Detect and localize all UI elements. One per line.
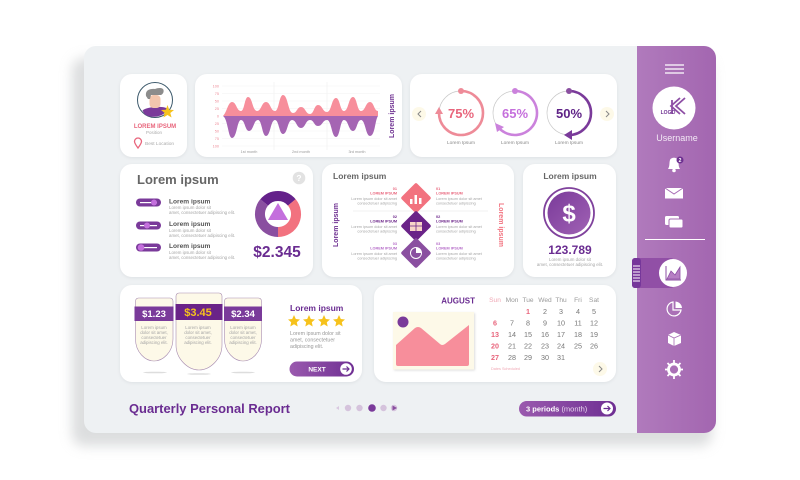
- diamond 3: [400, 237, 432, 269]
- dates: 26: [590, 342, 598, 350]
- dates: 23: [541, 342, 549, 350]
- price card 3: consectetuer: [230, 335, 256, 340]
- panel: profile: [120, 74, 187, 157]
- dates: 3: [559, 307, 563, 316]
- dates: 2: [543, 307, 547, 316]
- price card 2: $3.45: [184, 307, 212, 319]
- dates: 17: [557, 330, 565, 339]
- dates: 29: [524, 353, 532, 362]
- ring: 65%: 65%: [502, 106, 528, 121]
- left texts: [351, 187, 398, 260]
- toggle row 3: Lorem ipsum dolor sit: [169, 250, 212, 255]
- heading: Lorem ipsum: [290, 303, 344, 313]
- icon: help: ?: [296, 173, 302, 183]
- weekday headers: Thu: [555, 297, 567, 304]
- right texts: 03: [436, 242, 440, 246]
- icon: dollar coin: $: [562, 200, 576, 228]
- panel: toggles and donut: [120, 164, 313, 277]
- left texts: Lorem ipsum dolor sit amet: [351, 252, 398, 256]
- price card 3: $2.34: [231, 309, 256, 320]
- weekday headers: Tue: [522, 297, 534, 304]
- ring: 75%: 75%: [448, 106, 474, 121]
- toggle row 3: amet, consectetuer adipiscing elit.: [169, 255, 235, 260]
- panel: calendar: [374, 285, 616, 382]
- weekday headers: Fri: [574, 297, 582, 304]
- dates: 15: [524, 330, 532, 339]
- toggle row 3: [136, 243, 235, 260]
- sidebar background: [637, 46, 716, 433]
- ring: 65%: [493, 88, 537, 146]
- left texts: consectetuer adipiscing: [357, 202, 397, 206]
- dates: 1: [526, 307, 530, 316]
- price card 1: adipiscing elit.: [140, 340, 168, 345]
- dates: 21: [508, 342, 516, 350]
- dates: 24: [557, 342, 565, 350]
- y axis labels: 50: [215, 100, 219, 104]
- x axis labels: [241, 150, 366, 154]
- left texts: consectetuer adipiscing: [357, 256, 397, 260]
- icon: pie: [667, 302, 682, 316]
- price card 2: dolor sit amet,: [184, 330, 212, 335]
- sidebar: [632, 46, 716, 433]
- dates: 12: [590, 318, 598, 328]
- right texts: LOREM IPSUM: [436, 192, 463, 196]
- location: Best Location: [145, 141, 174, 147]
- dates: 13: [491, 330, 499, 339]
- icon: active chart: [659, 259, 687, 287]
- divider: [645, 239, 705, 240]
- left texts: Lorem ipsum dolor sit amet: [351, 225, 398, 229]
- toggle row 2: [136, 221, 235, 238]
- price card 2: [176, 293, 222, 375]
- ring: 75%: Lorem Ipsum: [447, 140, 475, 146]
- panel: pricing: [120, 285, 362, 382]
- dates: 5: [592, 307, 596, 316]
- left texts: 03: [393, 242, 397, 246]
- dates: 30: [541, 353, 549, 362]
- grid: [222, 82, 380, 150]
- rating stars: [288, 315, 345, 326]
- active tab: [632, 258, 674, 288]
- description: [290, 331, 341, 350]
- dates: [491, 307, 598, 362]
- left texts: LOREM IPSUM: [370, 220, 397, 224]
- value: $2.345: [253, 244, 301, 261]
- icon: menu: [665, 65, 684, 73]
- weekday headers: Wed: [538, 297, 552, 304]
- avatar: [138, 82, 172, 118]
- button: previous: [412, 107, 426, 121]
- diamond 1: [400, 182, 432, 214]
- y axis labels: 25: [215, 107, 219, 111]
- right texts: 02: [436, 215, 440, 219]
- left texts: consectetuer adipiscing: [357, 230, 397, 234]
- y axis labels: 25: [215, 122, 219, 126]
- dates: 19: [590, 330, 598, 339]
- heading: Lorem ipsum: [137, 172, 219, 187]
- weekday headers: [489, 297, 599, 304]
- dates: 9: [543, 318, 547, 328]
- panel: coin: [523, 164, 616, 277]
- right texts: LOREM IPSUM: [436, 220, 463, 224]
- name: LOREM IPSUM: [134, 124, 176, 130]
- username: Username: [656, 133, 698, 143]
- price card 3: adipiscing elit.: [229, 340, 257, 345]
- description: Lorem ipsum dolor sit: [549, 257, 592, 262]
- right texts: Lorem ipsum dolor sit amet: [436, 225, 483, 229]
- left texts: 01: [393, 187, 397, 191]
- price card 1: Lorem ipsum: [141, 325, 167, 330]
- price card 3: dolor sit amet,: [229, 330, 257, 335]
- y axis labels: 75: [215, 92, 219, 96]
- right texts: 01: [436, 187, 440, 191]
- drop shadow of dashboard: [72, 58, 712, 446]
- price card 3: Lorem ipsum: [230, 325, 256, 330]
- right texts: LOREM IPSUM: [436, 246, 463, 250]
- icon: box: [668, 332, 681, 346]
- pink series: [223, 95, 378, 116]
- toggle row 1: Lorem ipsum dolor sit: [169, 205, 212, 210]
- icon: envelope: [665, 188, 683, 198]
- dates: 22: [524, 342, 532, 350]
- icon: bell: [668, 156, 684, 172]
- dates: 25: [574, 342, 582, 350]
- price card 2: adipiscing elit.: [184, 340, 212, 345]
- logo: [652, 86, 696, 130]
- toggle row 2: Lorem ipsum: [169, 221, 211, 228]
- y axis labels: [213, 84, 219, 148]
- icon: star: [161, 105, 174, 118]
- left texts: LOREM IPSUM: [370, 192, 397, 196]
- heading: Lorem ipsum: [333, 171, 387, 181]
- diamond 2: [400, 210, 432, 242]
- next button: NEXT: [308, 366, 326, 374]
- y axis labels: 100: [213, 144, 219, 148]
- right texts: [436, 187, 483, 260]
- button: next: [600, 107, 614, 121]
- dates: 8: [526, 318, 530, 328]
- panel: diamonds: [322, 164, 514, 277]
- y axis labels: 0: [217, 114, 219, 118]
- left texts: 02: [393, 215, 397, 219]
- ring: 75%: [435, 88, 483, 146]
- vertical label left: Lorem ipsum: [333, 203, 340, 247]
- price card 2: Lorem ipsum: [185, 325, 211, 330]
- right texts: consectetuer adipiscing: [436, 230, 476, 234]
- next button: [290, 362, 354, 376]
- ring: 50%: 50%: [556, 106, 582, 121]
- description: adipiscing elit.: [290, 344, 323, 350]
- footnote: Dates Scheduled: [491, 367, 520, 371]
- icon: bell: 2: [679, 158, 682, 164]
- left texts: LOREM IPSUM: [370, 246, 397, 250]
- dates: 11: [574, 318, 582, 328]
- description: amet, consectetuer: [290, 338, 335, 344]
- x axis labels: 2nd month: [292, 150, 310, 154]
- dates: 20: [491, 342, 499, 350]
- title: Quarterly Personal Report: [129, 402, 291, 416]
- heading: Lorem ipsum: [543, 171, 597, 181]
- weekday headers: Sat: [589, 297, 599, 304]
- right texts: Lorem ipsum dolor sit amet: [436, 197, 483, 201]
- month: AUGUST: [441, 296, 475, 306]
- description: Lorem ipsum dolor sit: [290, 331, 341, 337]
- price card 3: [224, 298, 262, 373]
- ring: 50%: Lorem Ipsum: [555, 140, 583, 146]
- dates: 16: [541, 330, 549, 339]
- price card 1: $1.23: [142, 309, 166, 320]
- donut chart: [260, 196, 296, 232]
- value: 123.789: [548, 243, 592, 257]
- toggle row 1: amet, consectetuer adipiscing elit.: [169, 210, 235, 215]
- logo: LOGO: [661, 110, 675, 116]
- y axis labels: 75: [215, 137, 219, 141]
- ring: 50%: [547, 88, 591, 146]
- y axis labels: 50: [215, 130, 219, 134]
- pagination: [336, 404, 397, 412]
- dates: 27: [491, 353, 499, 362]
- right texts: consectetuer adipiscing: [436, 202, 476, 206]
- left texts: Lorem ipsum dolor sit amet: [351, 197, 398, 201]
- right texts: Lorem ipsum dolor sit amet: [436, 252, 483, 256]
- periods button: [519, 401, 616, 416]
- y axis labels: 100: [213, 84, 219, 88]
- dates: 6: [493, 318, 497, 328]
- dates: 10: [557, 318, 565, 328]
- x axis labels: 1st month: [241, 150, 257, 154]
- position: Position: [146, 130, 162, 135]
- panel: coin: amet, consectetuer adipiscing elit.: [537, 262, 603, 267]
- dates: 31: [557, 353, 565, 362]
- ring: 65%: Lorem Ipsum: [501, 140, 529, 146]
- periods button: 3 periods (month): [526, 404, 588, 414]
- toggle row 3: Lorem ipsum: [169, 243, 211, 250]
- icon: gear: [665, 360, 683, 379]
- price card 1: consectetuer: [141, 335, 167, 340]
- row dividers: [353, 210, 488, 212]
- weekday headers: Sun: [489, 297, 501, 304]
- dates: 28: [508, 353, 516, 362]
- price card 2: consectetuer: [185, 335, 211, 340]
- icon: help: [293, 172, 305, 184]
- button: next month: [593, 362, 607, 376]
- price card 1: dolor sit amet,: [140, 330, 168, 335]
- dates: 7: [510, 318, 514, 328]
- dates: 14: [508, 330, 516, 339]
- toggle row 2: amet, consectetuer adipiscing elit.: [169, 233, 235, 238]
- icon: chat windows: [665, 216, 683, 228]
- toggle row 1: Lorem ipsum: [169, 198, 211, 206]
- x axis labels: 3rd month: [348, 150, 366, 154]
- toggle row 2: Lorem ipsum dolor sit: [169, 228, 212, 233]
- purple series: [223, 116, 378, 138]
- dashboard background panel: [84, 46, 716, 433]
- toggle row 1: [136, 198, 235, 215]
- picture: [393, 312, 474, 370]
- panel: progress rings: [410, 74, 617, 157]
- weekday headers: Mon: [506, 297, 519, 304]
- panel: area chart: [195, 74, 402, 157]
- price card 1: [134, 298, 174, 373]
- dates: 18: [574, 330, 582, 339]
- vertical label right: Lorem ipsum: [497, 203, 504, 247]
- vertical label: Lorem ipsum: [389, 94, 396, 138]
- right texts: consectetuer adipiscing: [436, 256, 476, 260]
- dates: 4: [576, 307, 580, 316]
